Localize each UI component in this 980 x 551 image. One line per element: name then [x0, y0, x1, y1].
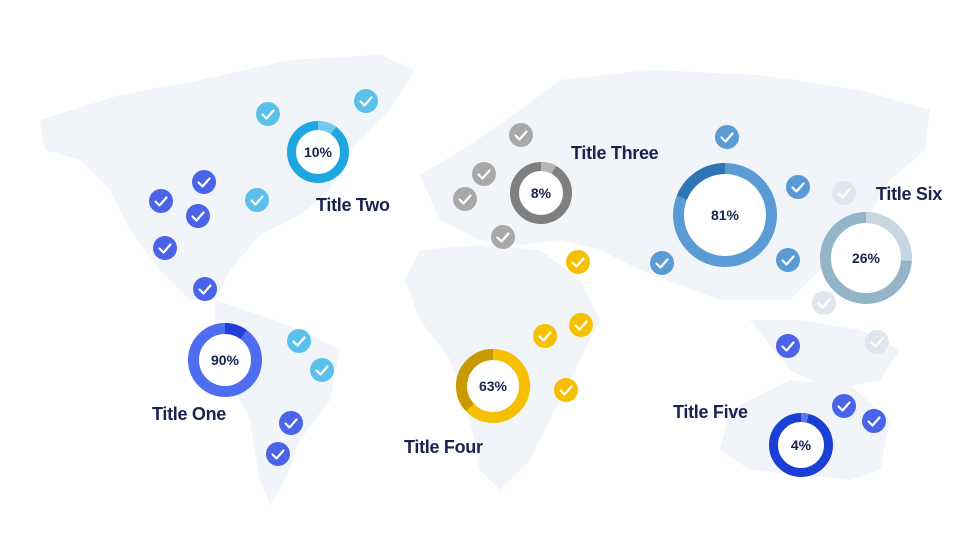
donut: Title One 90%: 90%: [211, 352, 240, 368]
donut: Title Five 4%: [774, 418, 828, 472]
checks: mid blue: [650, 125, 810, 275]
donut: Title Four 63%: [462, 354, 524, 418]
title: Title Four: Title Four: [404, 437, 483, 457]
title: Title One: Title One: [152, 404, 226, 424]
donut: Title Four 63%: 63%: [479, 378, 508, 394]
donut: 81%: [678, 168, 772, 262]
donut: Title Two 10%: [292, 126, 344, 178]
donut: Title Five 4%: 4%: [791, 437, 812, 453]
world map background: [40, 55, 930, 505]
donut: Title Three 8%: 8%: [531, 185, 552, 201]
checks: yellow: [533, 250, 593, 402]
checkmarks: [156, 98, 882, 458]
donut: Title Two 10%: 10%: [304, 144, 333, 160]
checks: pale: [812, 181, 889, 354]
title: Title Two: Title Two: [316, 195, 390, 215]
checks: light blue: [245, 89, 378, 382]
donut: Title Three 8%: [514, 166, 568, 220]
donut: Title One 90%: [194, 328, 256, 392]
checks: dark blue: [149, 170, 886, 466]
title: Title Six: Title Six: [876, 184, 942, 204]
donut: Title Six 26%: [826, 218, 906, 298]
donut: 81%: 81%: [711, 207, 740, 223]
donut: Title Six 26%: 26%: [852, 250, 881, 266]
checks: gray: [453, 123, 533, 249]
title: Title Five: Title Five: [673, 402, 748, 422]
title: Title Three: Title Three: [571, 143, 659, 163]
